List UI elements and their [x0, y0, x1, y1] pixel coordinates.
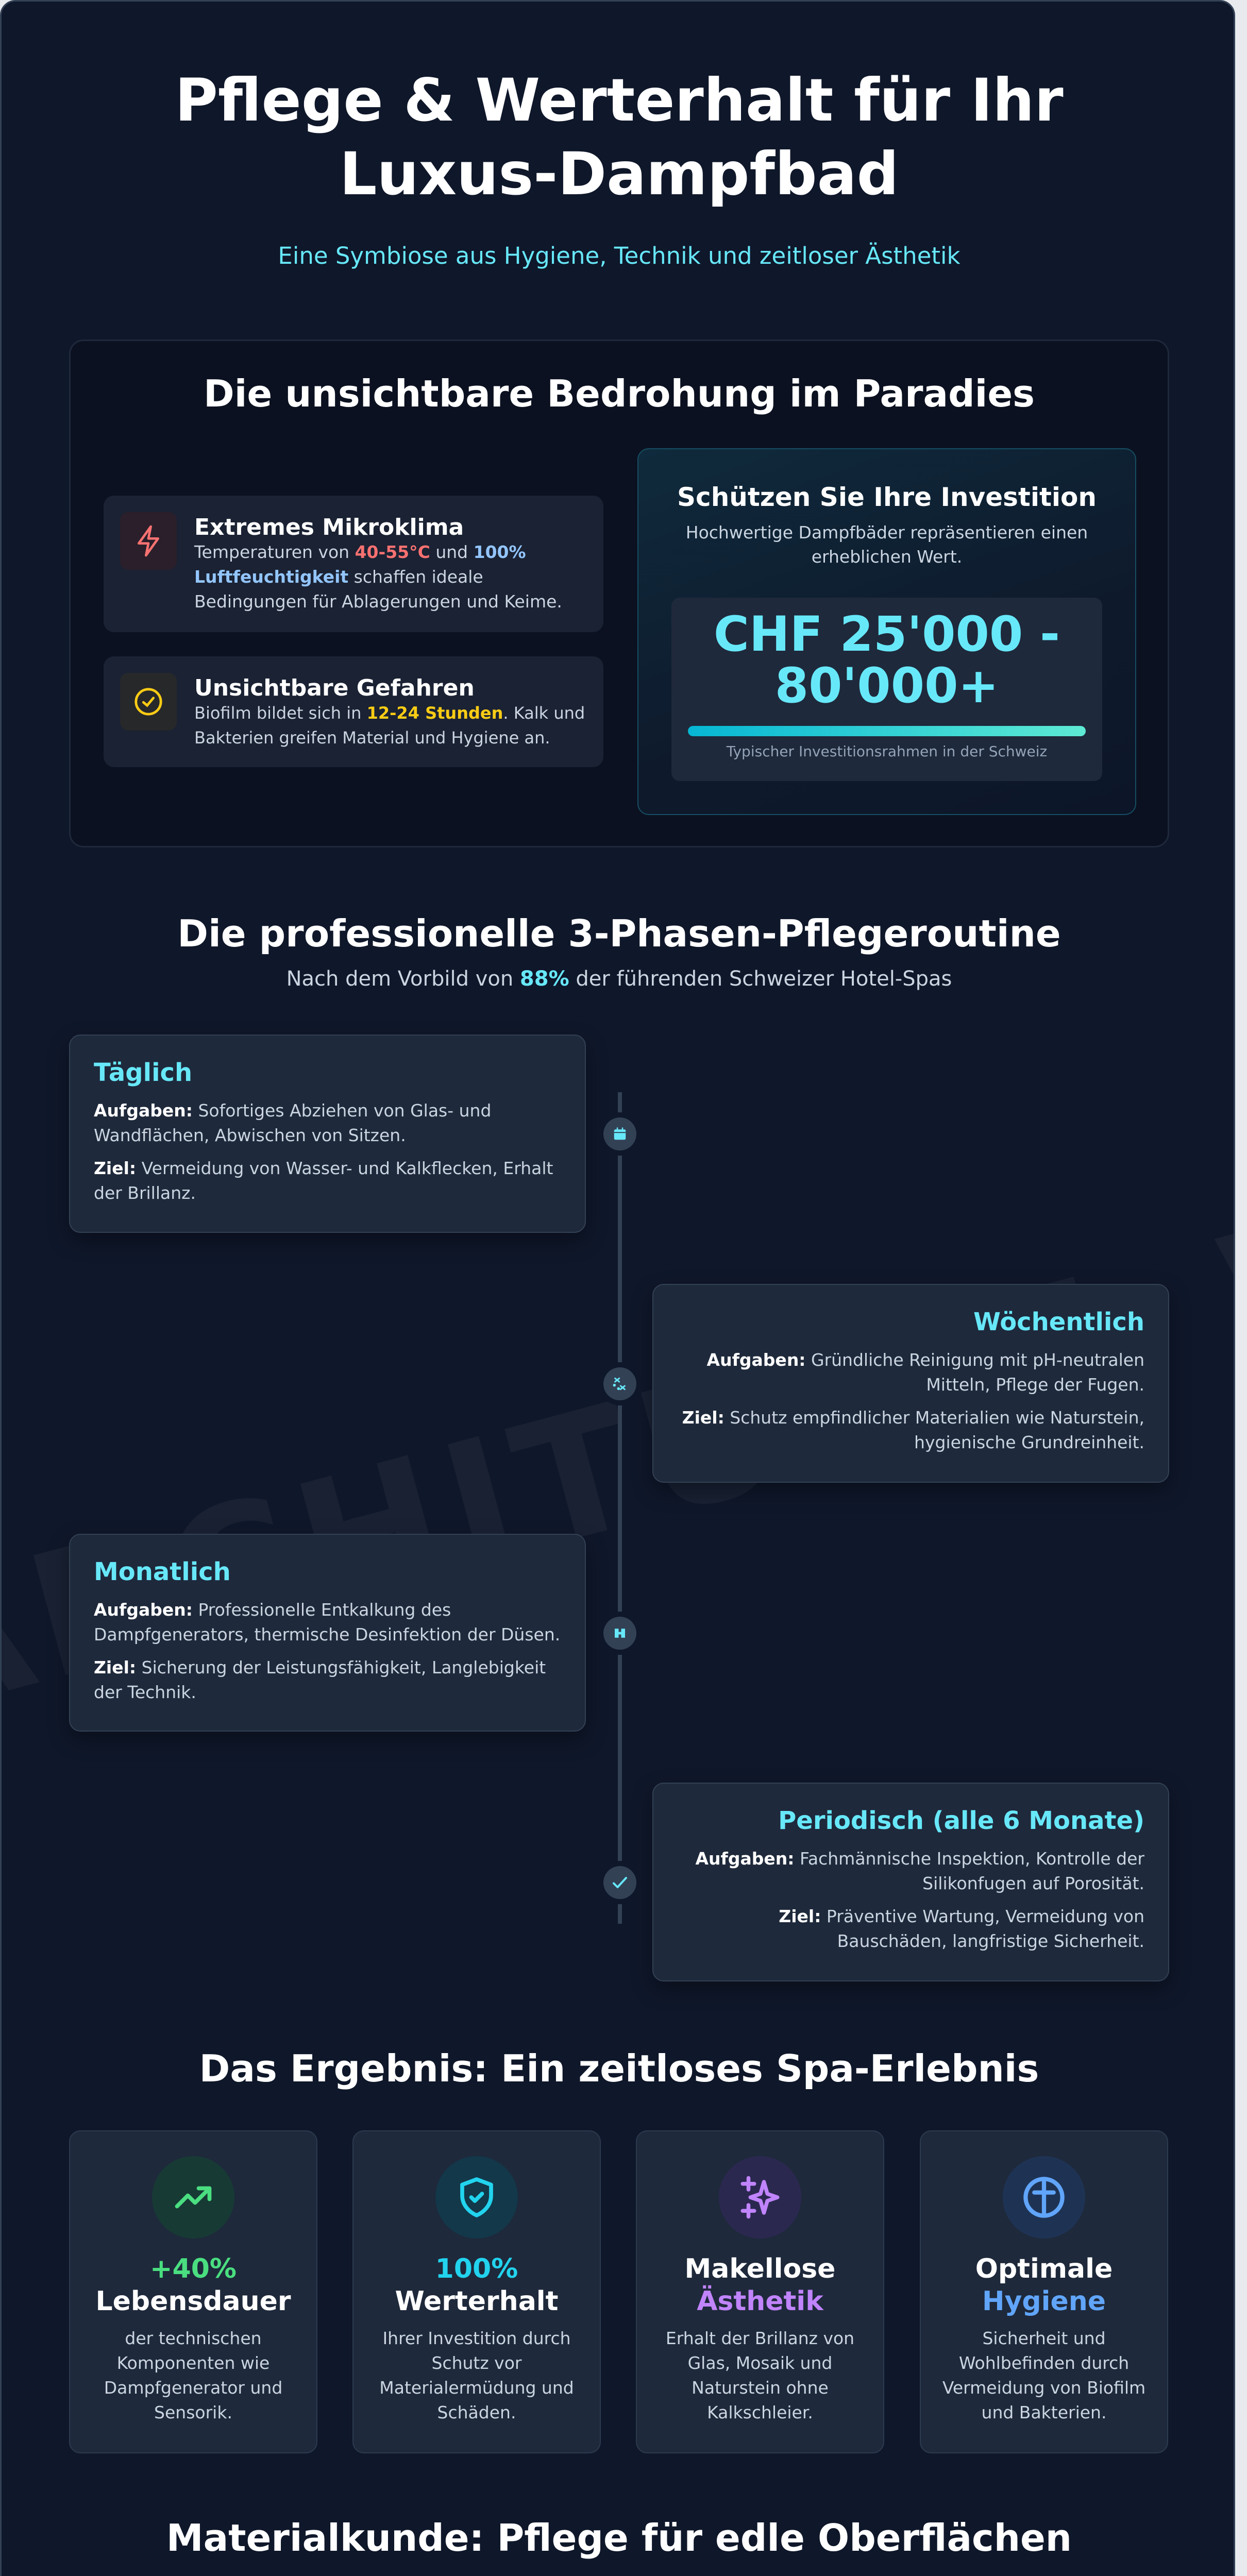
card: Periodisch: Aufgaben: Fachmännische Inspektion, Kontrolle der Silikonfugen auf Porosität. — [695, 1849, 1144, 1893]
icon: trend — [152, 2156, 234, 2239]
card: Periodisch: Periodisch (alle 6 Monate) — [778, 1806, 1144, 1835]
icon: tool dot — [603, 1617, 636, 1650]
result: Werterhalt — [352, 2130, 601, 2453]
result: Ästhetik: Ästhetik — [697, 2286, 823, 2317]
card: Monatlich: Ziel: Sicherung der Leistungsfähigkeit, Langlebigkeit der Technik. — [94, 1657, 546, 1702]
card: Periodisch — [652, 1783, 1169, 1981]
card: Monatlich: Aufgaben: Professionelle Entkalkung des Dampfgenerators, thermische Desinfektion der Düsen. — [94, 1600, 560, 1645]
card: investment — [637, 448, 1136, 815]
result: Werterhalt: Ihrer Investition durch Schutz vor Materialermüdung und Schäden. — [379, 2328, 574, 2422]
icon: check circle — [120, 673, 177, 731]
icon: sparkle dot — [603, 1367, 636, 1400]
timeline line — [618, 1092, 622, 1924]
heading: investment: Schützen Sie Ihre Investition — [677, 482, 1097, 512]
result: Lebensdauer: +40% — [150, 2253, 237, 2284]
result: Hygiene: Hygiene — [982, 2286, 1106, 2317]
card: Mikroklima — [104, 496, 603, 632]
icon: shield — [435, 2156, 518, 2239]
card: Monatlich: Monatlich — [94, 1557, 231, 1586]
card: Täglich: Ziel: Vermeidung von Wasser- und Kalkflecken, Erhalt der Brillanz. — [94, 1158, 553, 1203]
result: Ästhetik — [636, 2130, 884, 2453]
title: Pflege & Werterhalt für Ihr — [175, 66, 1064, 134]
card: Wöchentlich — [652, 1284, 1169, 1483]
result: Ästhetik: Erhalt der Brillanz von Glas, Mosaik und Naturstein ohne Kalkschleier. — [666, 2328, 854, 2422]
heading: routine: Die professionelle 3-Phasen-Pflegeroutine — [177, 912, 1061, 955]
price box — [671, 598, 1102, 781]
price box: Typischer Investitionsrahmen in der Schweiz — [727, 743, 1047, 760]
card: Täglich — [69, 1035, 586, 1233]
card: Täglich: Täglich — [94, 1058, 192, 1087]
subtitle: Eine Symbiose aus Hygiene, Technik und zeitloser Ästhetik — [278, 242, 960, 269]
title: Luxus-Dampfbad — [340, 140, 899, 208]
result: Werterhalt: Werterhalt — [395, 2286, 558, 2317]
icon: sparkles — [719, 2156, 801, 2239]
title — [175, 66, 1064, 208]
icon: calendar dot — [603, 1117, 636, 1150]
card: Wöchentlich: Aufgaben: Gründliche Reinigung mit pH-neutralen Mitteln, Pflege der Fugen. — [707, 1350, 1144, 1395]
text: investment: Hochwertige Dampfbäder repräsentieren einen erheblichen Wert. — [686, 522, 1088, 567]
text: Gefahren: Biofilm bildet sich in 12-24 Stunden. Kalk und Bakterien greifen Material und Hygiene an. — [194, 703, 585, 748]
card: Monatlich — [69, 1534, 586, 1732]
icon: check dot — [603, 1866, 636, 1899]
panel: threat — [69, 340, 1169, 848]
price box: 80'000+ — [775, 658, 999, 714]
heading: threat: Die unsichtbare Bedrohung im Paradies — [204, 372, 1035, 415]
icon: lightning — [120, 512, 177, 570]
text: Mikroklima: Temperaturen von 40-55°C und 100% Luftfeuchtigkeit schaffen ideale Bedingungen für Ablagerungen und Keime. — [194, 542, 562, 612]
text: Gefahren — [194, 675, 585, 748]
text: Gefahren: Unsichtbare Gefahren — [194, 675, 475, 701]
card: Periodisch: Ziel: Präventive Wartung, Vermeidung von Bauschäden, langfristige Sicherheit. — [779, 1906, 1144, 1951]
bar — [688, 726, 1086, 736]
result: Lebensdauer: Lebensdauer — [95, 2286, 291, 2317]
card: Wöchentlich: Ziel: Schutz empfindlicher Materialien wie Naturstein, hygienische Grundreinheit. — [682, 1408, 1144, 1452]
price box: CHF 25'000 - — [714, 606, 1060, 663]
icon: cross circle — [1003, 2156, 1085, 2239]
card: Wöchentlich: Wöchentlich — [973, 1308, 1144, 1336]
result: Hygiene: Optimale — [975, 2253, 1113, 2284]
result: Hygiene: Sicherheit und Wohlbefinden durch Vermeidung von Biofilm und Bakterien. — [942, 2328, 1145, 2422]
result: Hygiene — [920, 2130, 1168, 2453]
result: Werterhalt: 100% — [435, 2253, 518, 2284]
text: Mikroklima: Extremes Mikroklima — [194, 514, 464, 540]
result: Ästhetik: Makellose — [685, 2253, 835, 2284]
heading: materials: Materialkunde: Pflege für edle Oberflächen — [166, 2516, 1072, 2560]
card: Täglich: Aufgaben: Sofortiges Abziehen von Glas- und Wandflächen, Abwischen von Sitzen. — [94, 1100, 491, 1145]
subtitle: routine: Nach dem Vorbild von 88% der führenden Schweizer Hotel-Spas — [287, 967, 952, 991]
heading: result: Das Ergebnis: Ein zeitloses Spa-Erlebnis — [199, 2047, 1039, 2090]
result: Lebensdauer: der technischen Komponenten wie Dampfgenerator und Sensorik. — [104, 2328, 282, 2422]
card: Gefahren — [104, 656, 603, 767]
result: Lebensdauer — [69, 2130, 317, 2453]
